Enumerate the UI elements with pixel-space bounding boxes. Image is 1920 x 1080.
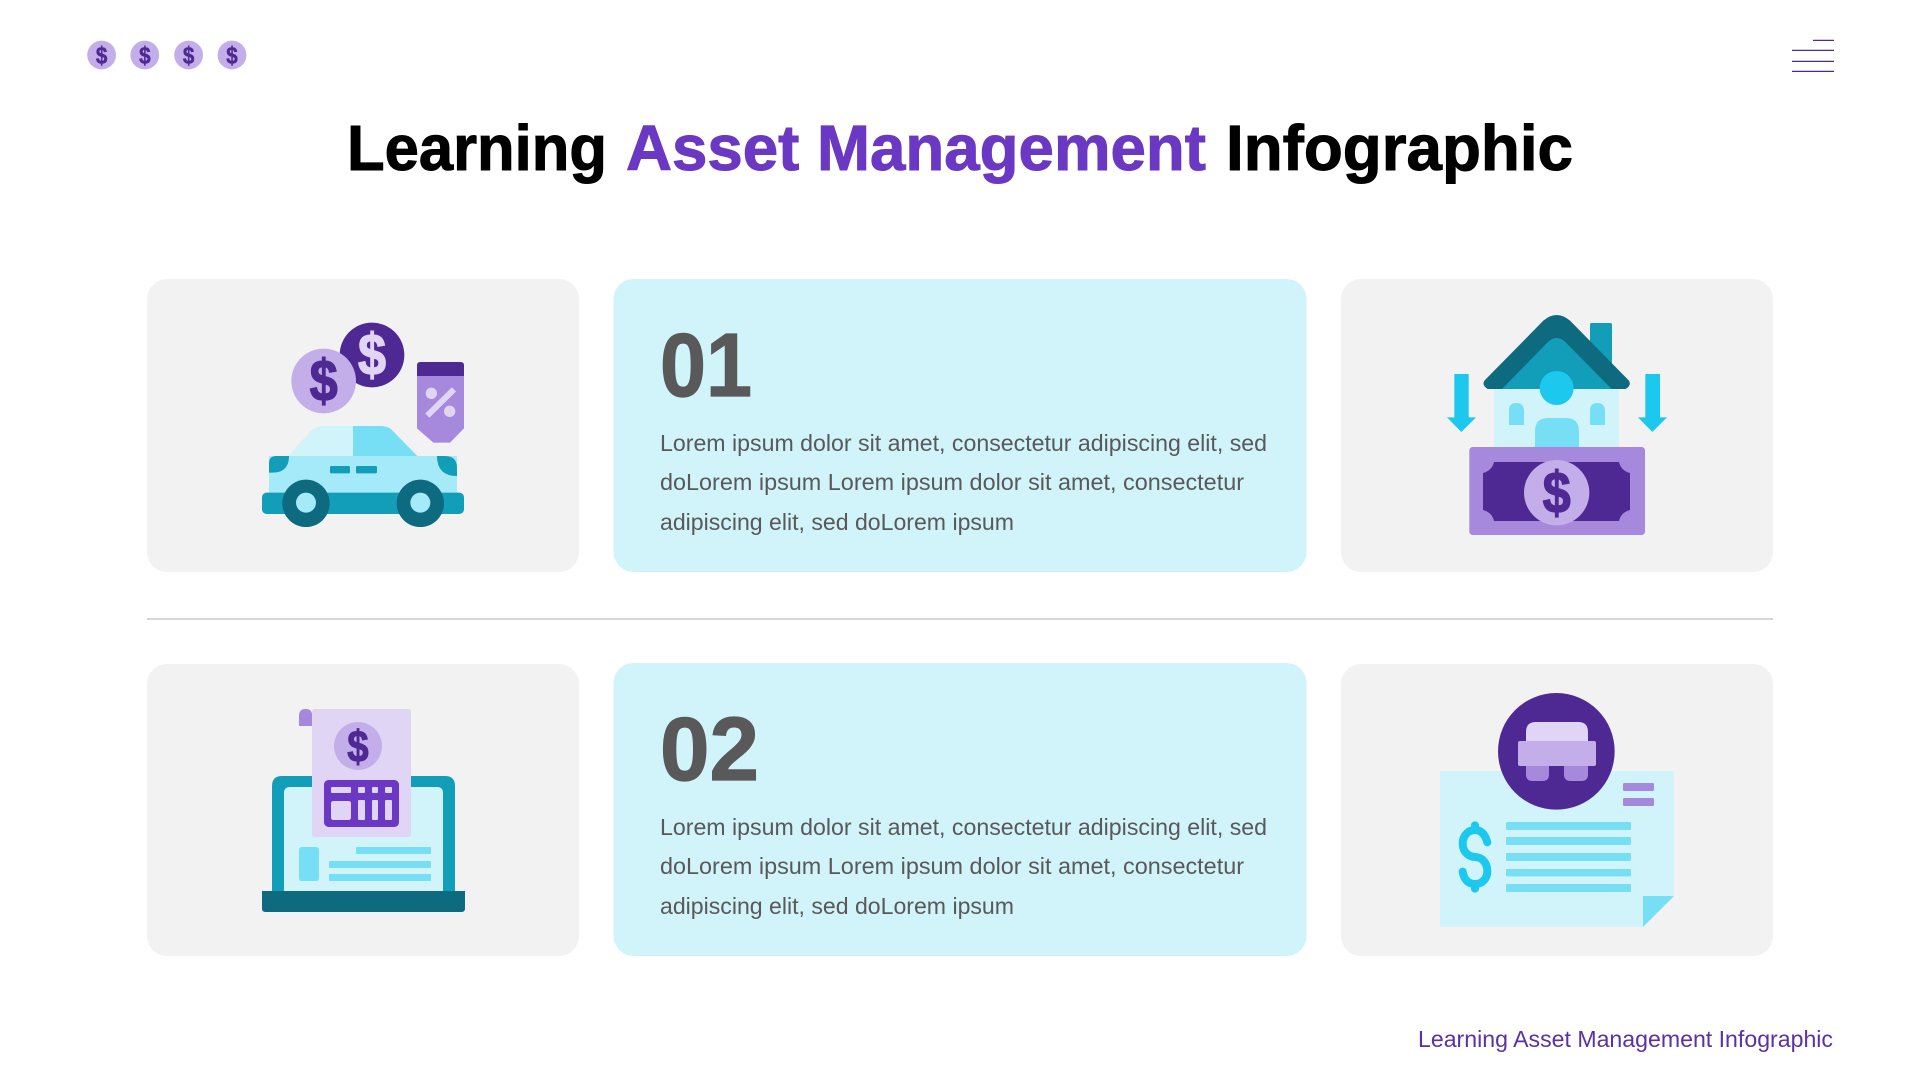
icon: car loan document [1440, 693, 1674, 927]
icon: laptop with invoice [262, 709, 465, 912]
title [347, 112, 1573, 184]
icon: laptop with invoice: $ [347, 721, 369, 771]
icon: car with coins and percent tag: $ [310, 347, 338, 414]
icon: car with coins and percent tag [262, 321, 464, 527]
panel: laptop icon card [147, 664, 579, 956]
panel: car icon card [147, 279, 579, 572]
text block 01: adipiscing elit, sed doLorem ipsum [660, 509, 1014, 535]
text block 02: adipiscing elit, sed doLorem ipsum [660, 893, 1014, 919]
text block 02: doLorem ipsum Lorem ipsum dolor sit amet, consectetur [660, 853, 1244, 879]
text block 01: Lorem ipsum dolor sit amet, consectetur adipiscing elit, sed [660, 430, 1267, 456]
footer label: Learning Asset Management Infographic [1418, 1026, 1833, 1052]
icon: house on banknote with arrows: $ [1543, 459, 1571, 525]
icon row: dollar coins: $ [226, 42, 238, 69]
number 01: 01 [660, 316, 752, 416]
icon: house on banknote with arrows [1447, 315, 1667, 535]
icon: car with coins and percent tag: $ [358, 321, 386, 388]
text block 01: doLorem ipsum Lorem ipsum dolor sit amet, consectetur [660, 469, 1244, 495]
panel: car document icon card [1341, 664, 1773, 956]
panel: house icon card [1341, 279, 1773, 572]
icon row: dollar coins: $ [183, 42, 195, 69]
title: Asset Management [626, 112, 1206, 184]
number 02: 02 [660, 700, 759, 800]
panel: step 02 [614, 663, 1306, 956]
icon: menu lines [1792, 40, 1834, 71]
icon row: dollar coins: $ [139, 42, 151, 69]
divider [147, 618, 1773, 620]
text block 02 [660, 814, 1267, 919]
icon row: dollar coins: $ [96, 42, 108, 69]
text block 01 [660, 430, 1267, 535]
icon row: dollar coins [87, 41, 246, 69]
panel: step 01 [614, 279, 1306, 572]
title: Infographic [1226, 112, 1573, 184]
text block 02: Lorem ipsum dolor sit amet, consectetur adipiscing elit, sed [660, 814, 1267, 840]
title: Learning [347, 112, 607, 184]
